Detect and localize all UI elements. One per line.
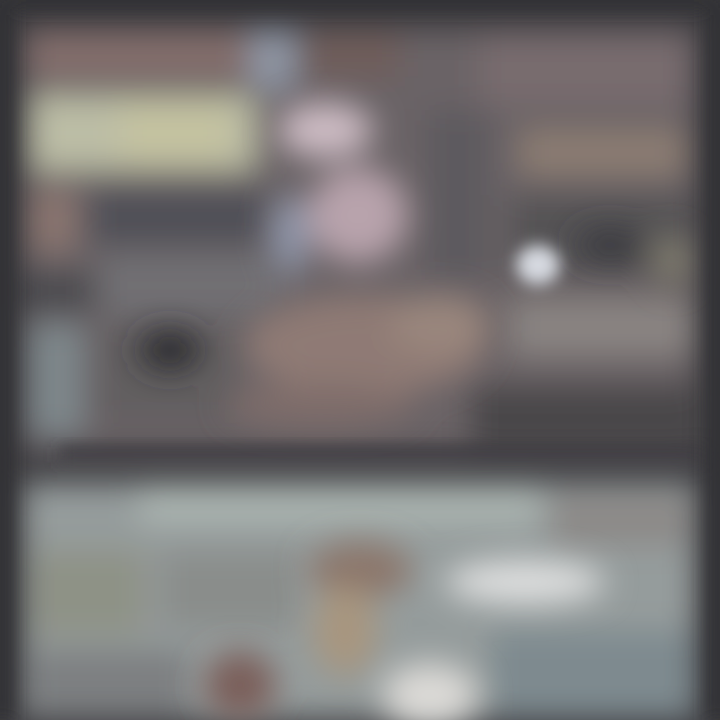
panel: lower scene — [22, 482, 697, 720]
panel: upper scene — [20, 28, 710, 453]
panel: dark divider band — [60, 447, 700, 463]
